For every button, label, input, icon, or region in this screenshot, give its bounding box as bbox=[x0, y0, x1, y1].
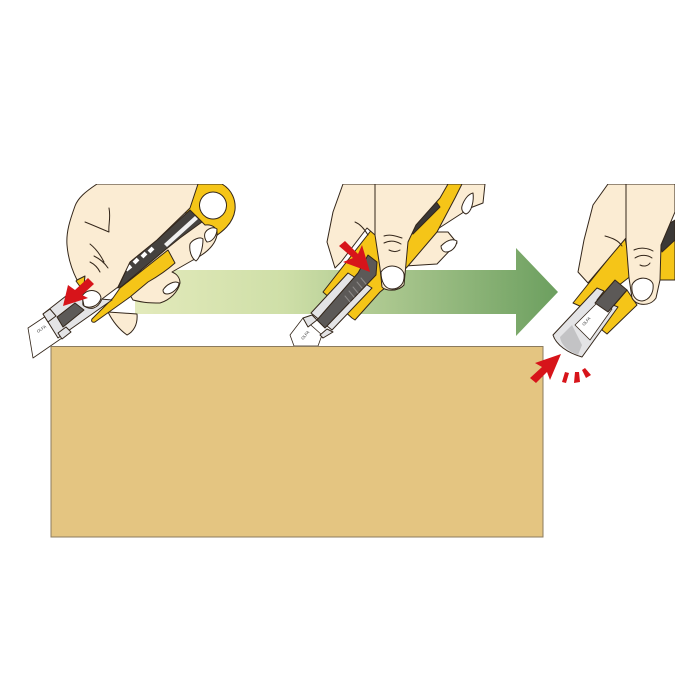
knife 2 blade bbox=[290, 318, 322, 346]
knife 2 upper body bbox=[323, 184, 462, 320]
hand 1 lower palm bbox=[108, 312, 137, 335]
illustration: three-step box cutter sequence bbox=[28, 184, 675, 538]
hand 3 left finger bbox=[578, 184, 626, 283]
finger nails 2 bbox=[441, 193, 473, 252]
step 2: hand locking slider bbox=[290, 184, 485, 346]
knife 2 dark grip bbox=[410, 200, 440, 234]
thumb nail 1 bbox=[82, 290, 101, 307]
knuckle lines bbox=[85, 208, 110, 272]
knife 1 lower body bbox=[92, 250, 175, 322]
thumb nail 2 bbox=[381, 266, 404, 289]
hand 2 back fingers bbox=[400, 184, 485, 266]
knife 3 head bbox=[553, 288, 618, 357]
step 3: hand releasing blade bbox=[553, 184, 675, 357]
knife 1 dark grip bbox=[118, 210, 202, 288]
knuckle lines 3 bbox=[605, 236, 653, 266]
knuckle lines 2 bbox=[355, 222, 402, 252]
hand 1 back fingers bbox=[130, 215, 217, 303]
blade 2 marking: OLFA bbox=[300, 329, 311, 341]
knife 1 ring handle bbox=[185, 184, 236, 236]
hand 3 thumb bbox=[626, 184, 675, 304]
red arrow 3 bbox=[530, 354, 561, 383]
knife 1 blade bbox=[28, 312, 62, 358]
impact marks bbox=[562, 368, 591, 383]
box bbox=[51, 346, 543, 537]
knife 3 slider bbox=[595, 280, 627, 312]
hand 1 main with thumb bbox=[67, 184, 198, 308]
finger nails 1 bbox=[163, 228, 217, 294]
direction arrow bbox=[135, 248, 558, 336]
red arrow 2 bbox=[339, 241, 370, 272]
knife 1 yellow tab behind thumb bbox=[76, 277, 84, 286]
hand 2 thumb bbox=[375, 184, 448, 290]
knife 3 rear body and grip bbox=[660, 240, 675, 280]
knife 1 blade holder bbox=[43, 296, 112, 338]
blade 1 marking: OLFA bbox=[36, 324, 47, 334]
knife 3 right body bbox=[602, 290, 637, 334]
thumb nail 3 bbox=[632, 278, 653, 301]
knife 3 left body bbox=[573, 238, 632, 307]
step 1: hand pushing slider bbox=[28, 184, 235, 358]
blade 3 marking: OLFA bbox=[581, 315, 592, 327]
knife 2 holder bbox=[311, 273, 372, 330]
red arrow 1 bbox=[63, 278, 94, 306]
hand 2 left finger bbox=[327, 184, 375, 268]
